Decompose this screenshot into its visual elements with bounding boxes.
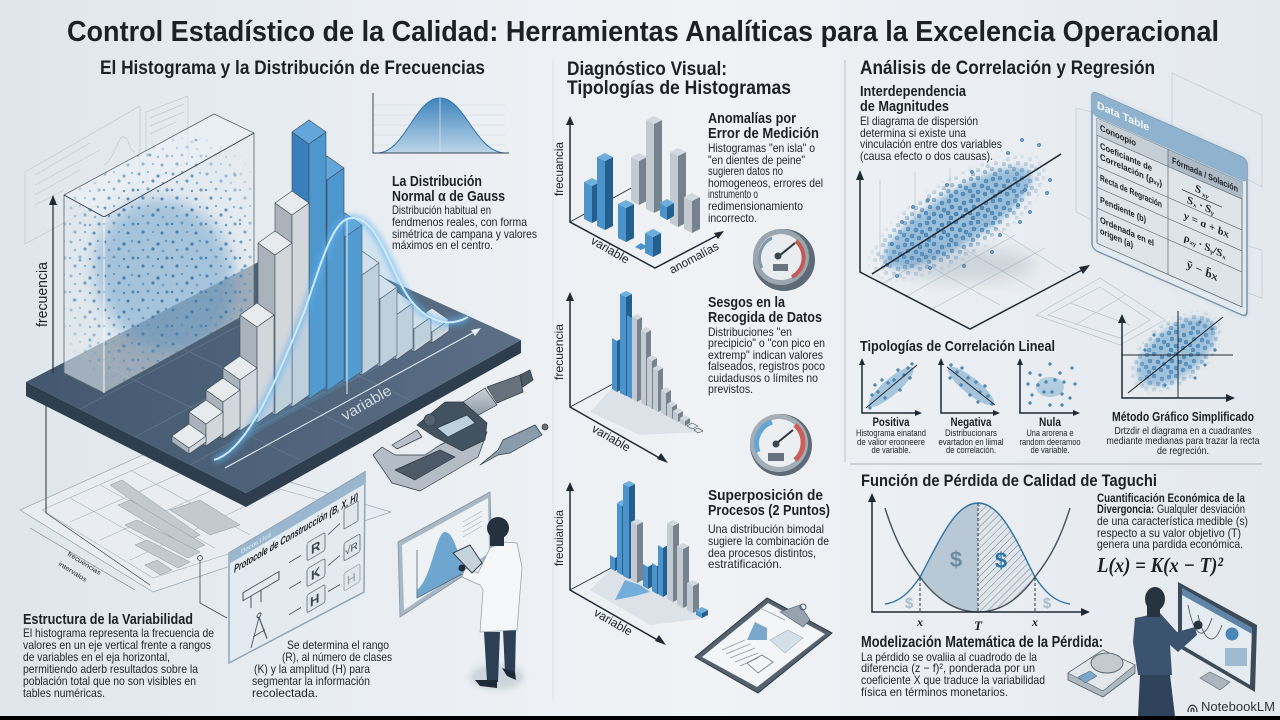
text block: measurement anomalies: Histogramas "en isla" o <box>708 141 815 155</box>
text block: interdependence: El diagrama de dispersión <box>860 114 978 128</box>
table: data table panel: origen (a) <box>1100 225 1133 250</box>
chart: 3D scatter plot with regression line <box>856 138 1090 330</box>
text block: data collection bias: precipicio" o "con pico en <box>708 336 825 350</box>
panel: protocol of construction: K <box>311 563 321 583</box>
text block: range and classes: Se determina el rango <box>287 638 389 652</box>
text block: positive correlation <box>856 415 926 455</box>
bottom black strip <box>0 716 1280 720</box>
text block: negative correlation <box>938 415 1004 455</box>
chart: measurement error histogram <box>552 116 724 277</box>
chart: measurement error histogram: variable <box>588 233 632 267</box>
text block: structure of variability: permitiendo aderb resultados sobre la <box>23 662 198 676</box>
chart: measurement error histogram: anomalías <box>667 239 721 277</box>
chart: data collection bias histogram: frecuencia <box>552 324 566 380</box>
figure: scientist with tablet <box>453 517 524 690</box>
text block: range and classes: (R), al número de clases <box>282 650 392 664</box>
faint floating documents behind data table <box>1076 73 1262 298</box>
chart: Taguchi loss curves: $ <box>950 547 962 572</box>
text block: negative correlation: de correlación. <box>946 445 996 455</box>
text block: process overlap: dea procesos distintos, <box>708 546 816 560</box>
table: data table panel: Recta de Regración <box>1100 172 1162 210</box>
icon: micrometer <box>373 370 548 491</box>
table: data table panel: Conoopio <box>1100 122 1136 148</box>
text block: structure of variability: valores en un eje vertical frente a rangos <box>23 638 211 652</box>
text block: interdependence <box>860 83 1002 163</box>
table: data table panel: xy <box>1201 189 1209 202</box>
chart: data collection bias histogram <box>552 291 703 463</box>
text block: interdependence: Interdependencia <box>860 83 967 100</box>
text block: null correlation: Nula <box>1039 415 1061 429</box>
text block: range and classes: recolectada. <box>252 686 318 700</box>
chart: Taguchi loss curves: x <box>1031 615 1038 629</box>
text block: null correlation <box>1020 415 1080 455</box>
text block: process overlap: Superposición de <box>708 487 823 504</box>
text block: mathematical modelling: física en términos monetarios. <box>861 685 1008 699</box>
text block: mathematical modelling: diferencia (z − f)², ponderada por un <box>861 661 1035 675</box>
lower sketch grid with flat histogram <box>20 445 391 592</box>
heading: Taguchi: Función de Pérdida de Calidad de Taguchi <box>861 471 1157 490</box>
text block: measurement anomalies: Error de Medición <box>708 125 819 142</box>
panel: correlation and regression <box>840 58 1262 457</box>
text block: economic quantification: Cuantificación Económica de la <box>1097 493 1246 505</box>
text block: process overlap: estratificación. <box>708 557 782 571</box>
text block: economic quantification: genera una pardida económica. <box>1097 537 1243 551</box>
table: data table panel: ȳ − b̄x <box>1185 256 1218 284</box>
table: data table panel: ρₓᵧ · Sᵧ/Sₓ <box>1183 231 1226 262</box>
table: data table panel: Sₓ · Sᵧ <box>1187 194 1214 218</box>
text block: data collection bias: Sesgos en la <box>708 294 786 311</box>
chart: bimodal overlap histogram: freouiancia <box>552 510 566 566</box>
chart: measurement error histogram: frecuancia <box>552 142 566 196</box>
text block: positive correlation: de variable. <box>872 445 910 455</box>
chart: data collection bias histogram: variable <box>590 421 633 455</box>
text block: mathematical modelling: coeficiente X que traduce la variabilidad <box>861 673 1045 687</box>
table: data table panel: Coeficiante de <box>1100 140 1152 173</box>
text block: null correlation: Una arorena e <box>1026 428 1074 438</box>
lower sketch grid with flat histogram: intervalos <box>57 561 89 584</box>
text block: economic quantification <box>1097 493 1248 551</box>
formula: loss function: L(x) = K(x − T)² <box>1096 553 1224 577</box>
faint background documents <box>25 96 188 244</box>
text block: interdependence: (causa efecto o dos causas). <box>860 149 993 163</box>
arrow: lower frequency axis <box>46 375 150 585</box>
text block: negative correlation: Distribucionars <box>945 428 997 438</box>
monitor with loss chart <box>1178 582 1257 692</box>
text block: structure of variability: Estructura de la Variabilidad <box>23 612 193 628</box>
chart: positive correlation <box>859 358 922 416</box>
panel: protocol of construction <box>229 472 365 663</box>
3D histogram bars <box>172 120 449 454</box>
glass data block with particles <box>64 114 254 394</box>
heading: histogram typologies: Tipologías de Histogramas <box>567 78 791 99</box>
chart: small Gaussian bell <box>373 93 509 153</box>
text block: interdependence: vinculación entre dos variables <box>860 137 1002 151</box>
text block: mathematical modelling: La pérdido se ovaliia al cuadrodo de la <box>861 650 1037 664</box>
panel: protocol of construction: Protocole de Construcción (B, X, H) <box>234 490 358 576</box>
text block: positive correlation: Positiva <box>872 415 910 429</box>
panel: protocol of construction: R <box>311 537 320 557</box>
text block: positive correlation: de valior erooneere <box>857 437 925 447</box>
icon: clipboard report <box>695 598 832 693</box>
text block: normal distribution: Normal α de Gauss <box>392 188 505 205</box>
panel: Taguchi loss function <box>861 471 1275 716</box>
faint tilted plane behind quadrant chart <box>1036 278 1165 345</box>
table: data table panel <box>1092 91 1247 317</box>
dark platform <box>26 240 521 507</box>
figure: engineer pointing at monitor <box>1133 587 1202 716</box>
text block: process overlap: Procesos (2 Puntos) <box>708 502 830 519</box>
text block: mathematical modelling: Modelización Matemática de la Pérdida: <box>861 634 1103 651</box>
chart: Taguchi loss curves: $ <box>905 595 914 612</box>
chart: Taguchi loss curves: $ <box>1043 595 1052 612</box>
text block: data collection bias <box>708 294 825 396</box>
text block: range and classes: segmentar la información <box>252 674 370 688</box>
text block: measurement anomalies: instrumento o <box>708 187 758 201</box>
icon: precision scale <box>1068 650 1135 697</box>
table: data table panel: Ordenada en el <box>1100 214 1154 248</box>
text block: normal distribution: La Distribución <box>392 173 482 190</box>
text block: negative correlation: evartadon en liimal <box>938 437 1004 447</box>
icon: gauge one <box>753 229 815 291</box>
chart board behind scientist <box>398 492 492 617</box>
text block: range and classes: (K) y la amplitud (H) para <box>254 662 370 676</box>
panel: protocol of construction: H <box>347 569 356 588</box>
text block: data collection bias: falseados, registros poco <box>708 359 825 373</box>
variable axis and label <box>225 328 481 468</box>
glowing normal curve <box>214 218 468 460</box>
text block: null correlation: de variable. <box>1030 445 1070 455</box>
text block: normal distribution: máximos en el centro. <box>392 238 493 252</box>
chart: simplified quadrant method <box>1118 311 1235 402</box>
text block: range and classes <box>252 638 392 700</box>
panel: histogram and frequency distribution <box>20 58 548 700</box>
chart: Taguchi loss curves <box>868 493 1090 633</box>
text block: structure of variability <box>23 612 214 700</box>
text block: normal distribution: simétrica de campana y valores <box>392 227 537 241</box>
panel: protocol of construction: Docos I.lcd <box>241 532 271 556</box>
panel: visual diagnosis <box>552 59 832 693</box>
heading: histogram typologies <box>567 59 791 99</box>
text block: data collection bias: extremp" indican valores <box>708 348 823 362</box>
icon: gauge two <box>750 414 812 476</box>
panel: protocol of construction: H <box>310 590 319 610</box>
text block: data collection bias: previstos. <box>708 382 753 396</box>
text block: data collection bias: Recogida de Datos <box>708 309 822 326</box>
text block: measurement anomalies: sugieren datos no <box>708 164 783 178</box>
text block: structure of variability: población total que no son visibles en <box>23 674 196 688</box>
heading: correlation section: Análisis de Correlación y Regresión <box>860 58 1155 79</box>
text block: process overlap: sugiere la combinación de <box>708 534 829 548</box>
text block: normal distribution: Distribución habitual en <box>392 203 491 217</box>
text block: data collection bias: Distribuciones "en <box>708 325 792 339</box>
text block: process overlap: Una distribución bimodal <box>708 522 824 536</box>
text block: measurement anomalies <box>708 110 823 225</box>
chart: Taguchi loss curves: x <box>916 615 923 629</box>
text block: measurement anomalies: incorrecto. <box>708 211 757 225</box>
text block: positive correlation: Histograma einatand <box>856 428 926 438</box>
arrow: frequency axis and label <box>34 195 57 373</box>
panel: protocol of construction: √R <box>345 540 358 558</box>
chart: bimodal overlap histogram <box>552 481 708 645</box>
text block: measurement anomalies: Anomalías por <box>708 110 796 127</box>
text block: economic quantification: de una característica medible (s) <box>1097 514 1248 528</box>
text block: structure of variability: El histograma representa la frecuencia de <box>23 626 214 640</box>
table: data table panel: S <box>1195 183 1201 197</box>
connector from grid to protocol panel <box>198 556 227 618</box>
text block: normal distribution: fendmenos reales, con forma <box>392 215 527 229</box>
heading: histogram typologies: Diagnóstico Visual: <box>567 59 727 80</box>
title: Control Estadístico de la Calidad: Herramientas Analíticas para la Excelencia Operacional <box>67 16 1219 48</box>
table: data table panel: Data Table <box>1097 100 1149 134</box>
chart: Taguchi loss curves: T <box>974 618 983 633</box>
arrow: frequency axis and label: frecuencia <box>34 261 51 327</box>
text block: process overlap <box>708 487 830 571</box>
text block: interdependence: de Magnitudes <box>860 98 949 115</box>
text block: mathematical modelling <box>861 634 1103 699</box>
text block: structure of variability: tables numéricas. <box>23 686 105 700</box>
text block: economic quantification: Divergoncia: Gualquler desviación <box>1097 504 1245 516</box>
text block: measurement anomalies: redimensionamiento <box>708 199 803 213</box>
lower sketch grid with flat histogram: frecuencias <box>66 551 103 577</box>
variable axis and label: variable <box>338 382 395 424</box>
text block: simplified graphical method <box>1106 409 1260 457</box>
text block: economic quantification: respecto a su valor objetivo (T) <box>1097 526 1241 540</box>
chart: negative correlation <box>938 358 1000 416</box>
text block: measurement anomalies: homogeneos, errores del <box>708 176 823 190</box>
text block: data collection bias: cuidadusos o límites no <box>708 371 818 385</box>
chart: Taguchi loss curves: $ <box>995 548 1007 573</box>
text block: structure of variability: de variables en el eja horizontal, <box>23 650 170 664</box>
heading: linear correlation types: Tipologías de Correlación Lineal <box>860 338 1055 355</box>
text block: interdependence: determina si existe una <box>860 126 966 140</box>
chart: null correlation <box>1017 358 1080 416</box>
table: data table panel: Correlación (ρₓᵧ) <box>1100 151 1162 189</box>
table: data table panel: Fórmada / Solación <box>1172 155 1238 194</box>
text block: measurement anomalies: "en dientes de peine" <box>708 153 805 167</box>
logo: NotebookLM: NotebookLM <box>1201 699 1275 714</box>
text block: negative correlation: Negativa <box>950 415 992 429</box>
text block: simplified graphical method: de regreción. <box>1157 445 1209 457</box>
text block: simplified graphical method: Drtzdir el diagrama en a cuadrantes <box>1114 425 1252 437</box>
text block: null correlation: random deeramoo <box>1020 437 1080 447</box>
text block: normal distribution <box>392 173 537 252</box>
table: data table panel: y = a + bx <box>1182 209 1229 241</box>
chart: bimodal overlap histogram: variable <box>592 605 635 639</box>
table: data table panel: Pendiente (b) <box>1100 194 1146 225</box>
heading: histogram section: El Histograma y la Distribución de Frecuencias <box>100 58 485 79</box>
